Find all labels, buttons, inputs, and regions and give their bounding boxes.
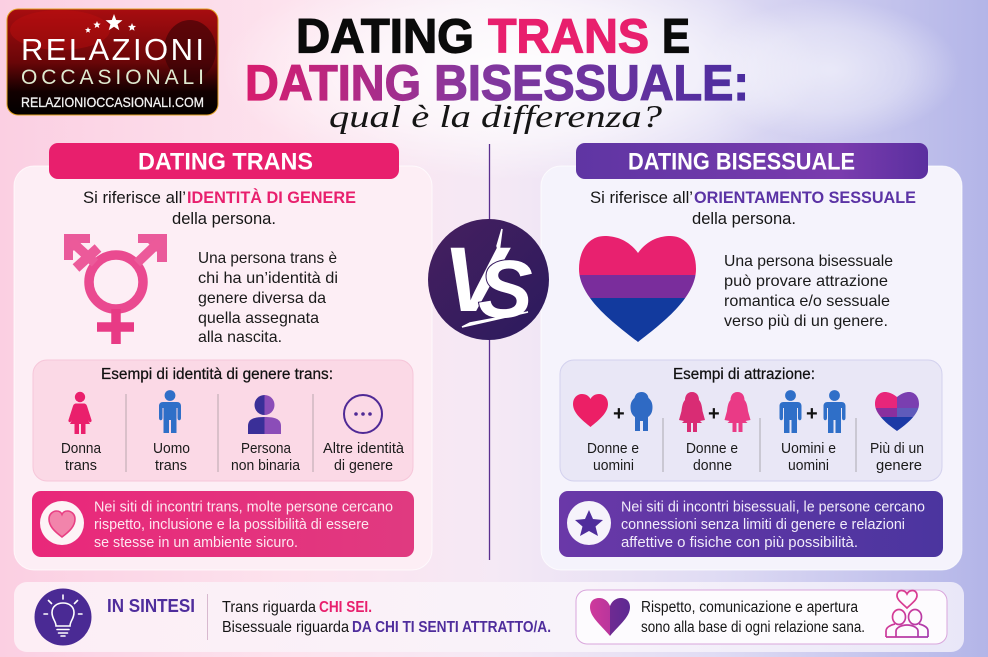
labels: Donna [61,441,102,457]
definition text: della persona. [692,209,796,228]
examples: attraction [560,360,942,481]
labels: genere [876,458,922,474]
icon: heart [590,598,630,636]
examples: attraction: Esempi di attrazione: [673,366,815,383]
labels: Donne e [587,441,639,457]
callout: bisessuale: Nei siti di incontri bisessuali, le persone cercano [621,498,925,516]
description: può provare attrazione [724,273,888,290]
callout: bisessuale: affettive o fisiche con più possibilità. [621,534,858,551]
header: dating bisessuale: DATING BISESSUALE [628,148,855,176]
heading: in sintesi: IN SINTESI [107,596,195,616]
summary text: DA CHI TI SENTI ATTRATTO/A. [352,619,551,636]
description: Una persona bisessuale [724,253,893,270]
title: TRANS [488,10,649,64]
labels: Uomini e [781,441,836,457]
callout: bisessuale: connessioni senza limiti di genere e relazioni [621,516,905,533]
description [198,250,338,346]
examples: gender identities: Esempi di identità di genere trans: [101,366,333,383]
panel: dating bisessuale [541,143,962,570]
definition text [83,188,356,228]
logo: RELAZIONI [21,32,204,67]
logo [7,9,218,115]
labels: donne [693,458,732,474]
icon: light bulb [34,588,92,646]
icon: multi-colour heart [875,392,919,431]
title: E [662,10,690,64]
icon: heart [49,511,75,537]
summary text: Bisessuale riguarda [222,619,349,636]
subtitle: qual è la differenza? [329,98,662,134]
summary bar [14,582,964,652]
labels: non binaria [231,458,301,474]
logo: OCCASIONALI [21,66,204,89]
labels: di genere [334,458,393,474]
vs badge [428,219,549,340]
labels: Più di un [870,441,924,457]
callout: trans: rispetto, inclusione e la possibilità di essere [94,516,369,533]
labels: Uomo [153,441,190,457]
callout: bisessuale [559,491,943,557]
icon: star [575,510,603,536]
definition text [590,188,916,228]
summary text [222,599,551,636]
icon: heart plus man: + [613,403,625,425]
description: genere diversa da [198,290,326,307]
icon: couple with heart [886,590,928,637]
box: respect note: sono alla base di ogni relazione sana. [641,619,865,636]
vs badge: V [443,229,511,331]
callout: trans [32,491,414,557]
title [245,10,749,134]
definition text: Si riferisce all’ [590,188,693,207]
icon: man plus man [780,390,846,433]
icon: other identities [344,395,382,433]
description: Una persona trans è [198,250,337,267]
icon: bisexual flag heart [579,236,696,342]
title: DATING BISESSUALE: [245,55,749,111]
box: respect note [576,590,947,644]
icon: man [159,390,181,433]
description: chi ha un’identità di [198,270,338,287]
labels: Altre identità [323,441,405,457]
labels: Persona [241,441,292,457]
examples: gender identities [33,360,413,481]
definition text: della persona. [172,209,276,228]
icon: non-binary person [248,395,281,434]
description: romantica e/o sessuale [724,293,890,310]
definition text: ORIENTAMENTO SESSUALE [694,188,916,207]
header: dating trans [49,143,399,179]
logo: RELAZIONIOCCASIONALI.COM [21,94,204,110]
description [724,253,893,330]
box: respect note: Rispetto, comunicazione e apertura [641,599,858,616]
header: dating trans: DATING TRANS [138,148,313,176]
definition text: Si riferisce all’ [83,188,186,207]
vs badge: S [478,244,533,335]
icon: transgender symbol [64,234,167,344]
labels: uomini [593,458,634,474]
callout: trans: se stesse in un ambiente sicuro. [94,534,298,551]
header: dating bisessuale [576,143,928,179]
icon: heart plus man [573,392,652,431]
labels [587,441,924,474]
callout: trans: Nei siti di incontri trans, molte persone cercano [94,498,393,516]
labels: Donne e [686,441,738,457]
definition text: IDENTITÀ DI GENERE [187,188,356,207]
description: alla nascita. [198,329,282,346]
summary text: CHI SEI. [319,599,372,616]
title: DATING [296,10,474,64]
icon: woman plus woman [679,392,750,432]
labels: trans [155,458,187,474]
summary text: Trans riguarda [222,599,316,616]
panel: dating trans [14,143,432,570]
center divider [488,144,490,560]
labels: uomini [788,458,829,474]
icon: woman [68,392,92,434]
icon: woman plus woman: + [708,403,720,425]
icon: stars [85,14,136,33]
labels: trans [65,458,97,474]
icon: man plus man: + [806,403,818,425]
labels [61,441,405,474]
description: verso più di un genere. [724,313,888,330]
description: quella assegnata [198,310,319,327]
